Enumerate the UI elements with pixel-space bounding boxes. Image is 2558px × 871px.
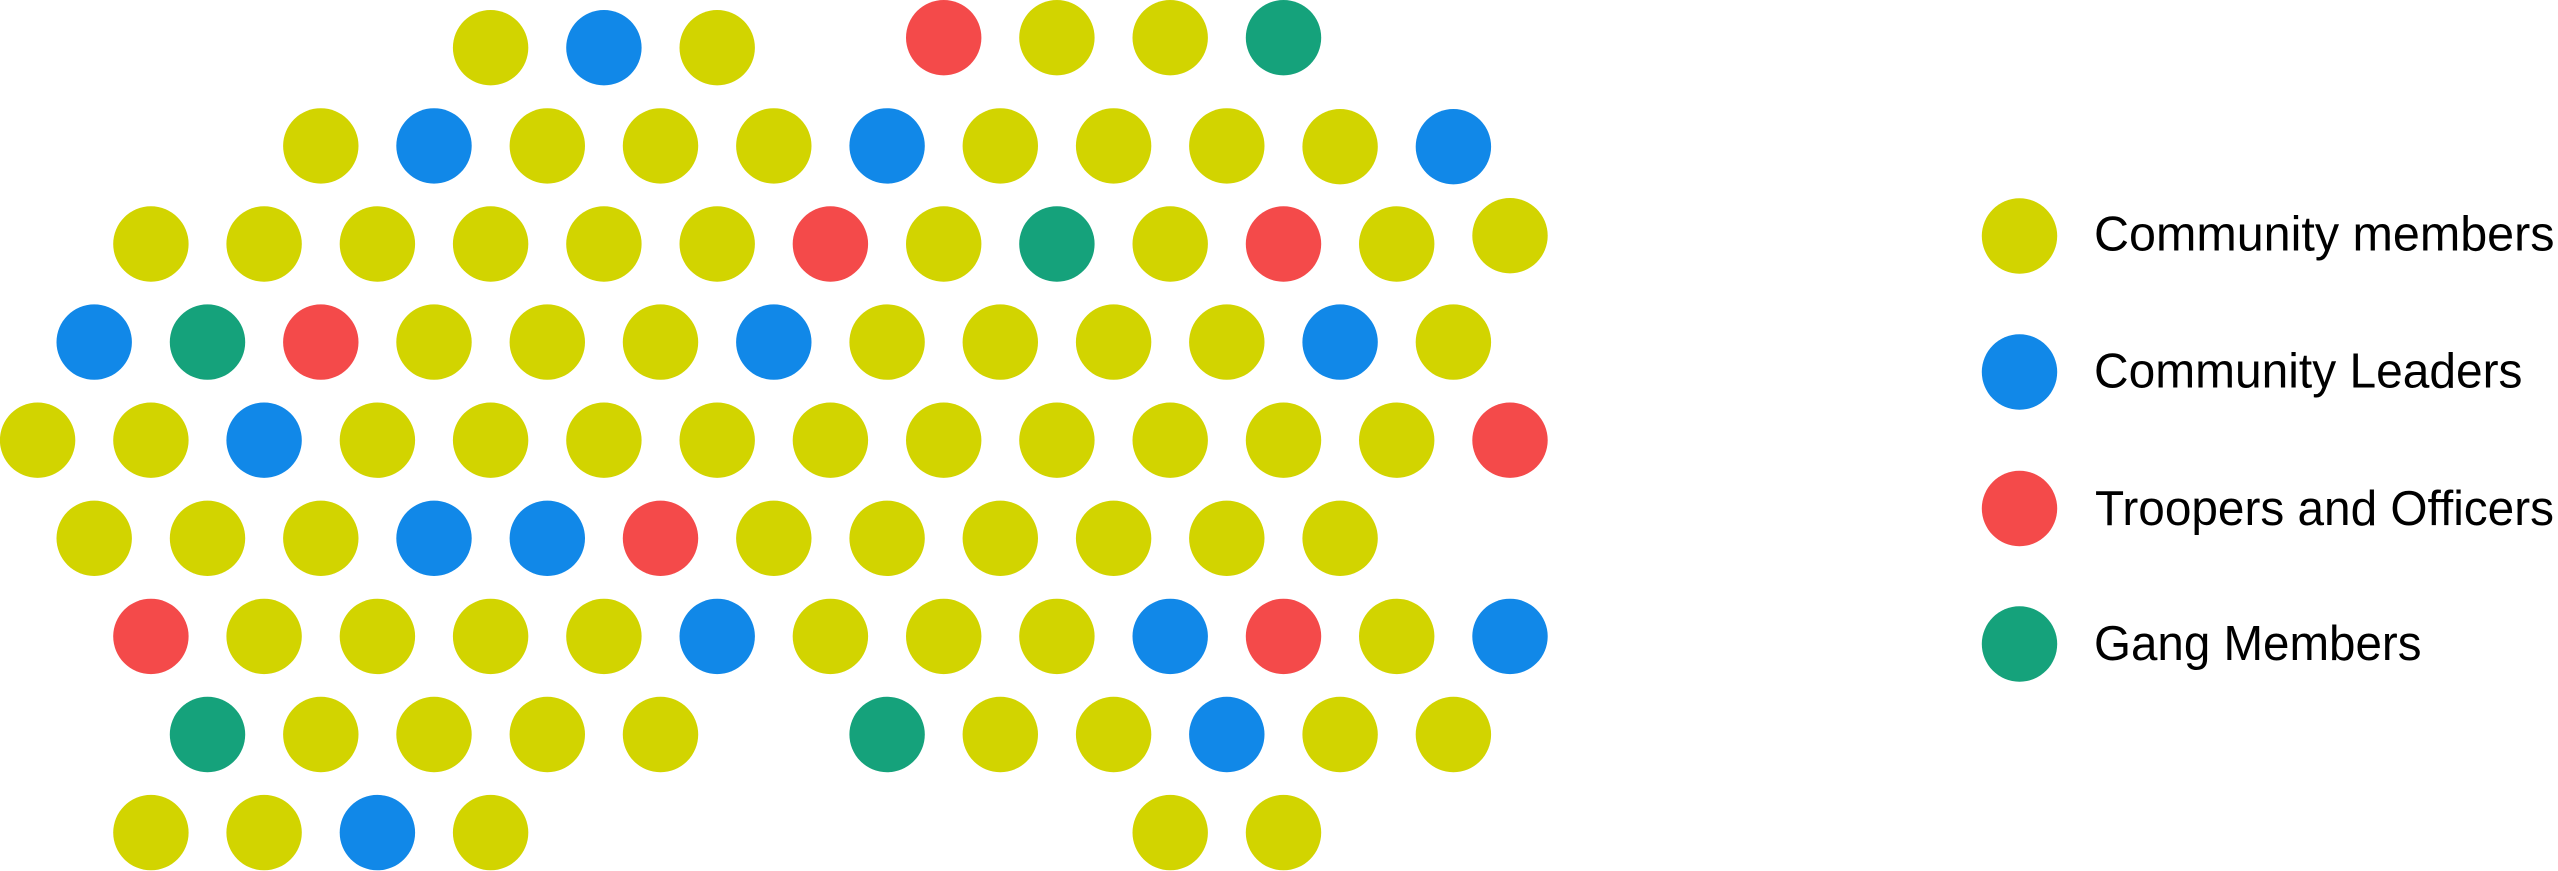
- legend item: Community members: Community members: [2094, 208, 2554, 262]
- dot row 9: [113, 795, 1321, 870]
- legend item: Troopers and Officers: [1982, 471, 2554, 546]
- dot row 2: [283, 108, 1491, 184]
- dot row 7: [113, 599, 1548, 674]
- dot row 8: [170, 697, 1491, 772]
- legend item: Gang Members: Gang Members: [2094, 617, 2422, 671]
- dot row 4: [56, 304, 1491, 380]
- legend item: Gang Members: [1982, 606, 2422, 682]
- dot row 1: [453, 0, 1321, 85]
- legend item: Troopers and Officers: Troopers and Officers: [2095, 482, 2554, 536]
- dot chart: hexagonal grid of people: [0, 0, 1548, 870]
- legend: [1982, 198, 2554, 682]
- legend item: Community members: [1982, 198, 2554, 274]
- dot row 5: [0, 402, 1548, 478]
- legend item: Community Leaders: [1982, 334, 2522, 410]
- dot row 3: [113, 198, 1548, 282]
- dot row 6: [56, 501, 1378, 576]
- legend item: Community Leaders: Community Leaders: [2094, 344, 2522, 398]
